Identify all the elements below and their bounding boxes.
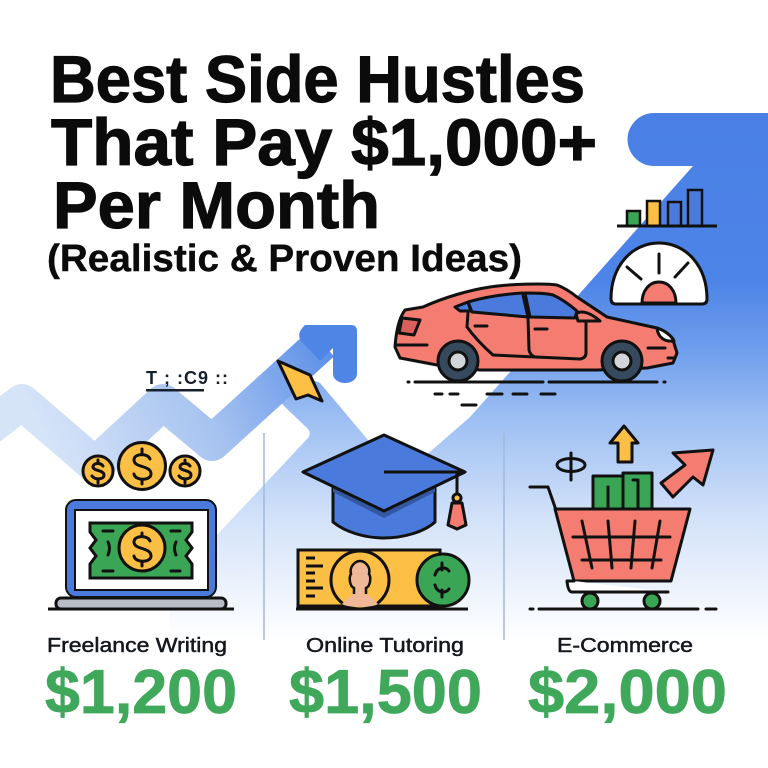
icon: shopping cart: [530, 426, 716, 609]
background diagonal blue shape: [170, 113, 768, 768]
value: $2,000: $2,000: [528, 658, 727, 727]
title: [50, 42, 597, 242]
value: $1,200: $1,200: [45, 658, 237, 727]
title: That Pay $1,000+: [51, 105, 597, 179]
small chart label: T ; :C9 ::: [146, 368, 228, 388]
column divider: [503, 433, 505, 640]
icon: car: [395, 284, 677, 405]
icon: tuition ticket with coin: [296, 550, 469, 609]
rising zigzag arrow: [0, 325, 357, 465]
icon: coins: [83, 442, 200, 490]
title: Best Side Hustles: [50, 42, 585, 116]
label: Online Tutoring: Online Tutoring: [306, 635, 464, 657]
label: Freelance Writing: Freelance Writing: [47, 635, 227, 657]
column divider: [263, 433, 265, 640]
title: Per Month: [53, 168, 380, 242]
icon: graduation cap: [303, 435, 466, 538]
value: $1,500: $1,500: [289, 658, 482, 727]
label: E-Commerce: E-Commerce: [557, 635, 693, 657]
icon: bar chart: [617, 190, 717, 226]
icon: gauge: [611, 243, 707, 304]
icon: laptop with banknote: [48, 500, 234, 609]
icon: cursor: [278, 361, 322, 401]
subtitle: (Realistic & Proven Ideas): [47, 238, 522, 280]
